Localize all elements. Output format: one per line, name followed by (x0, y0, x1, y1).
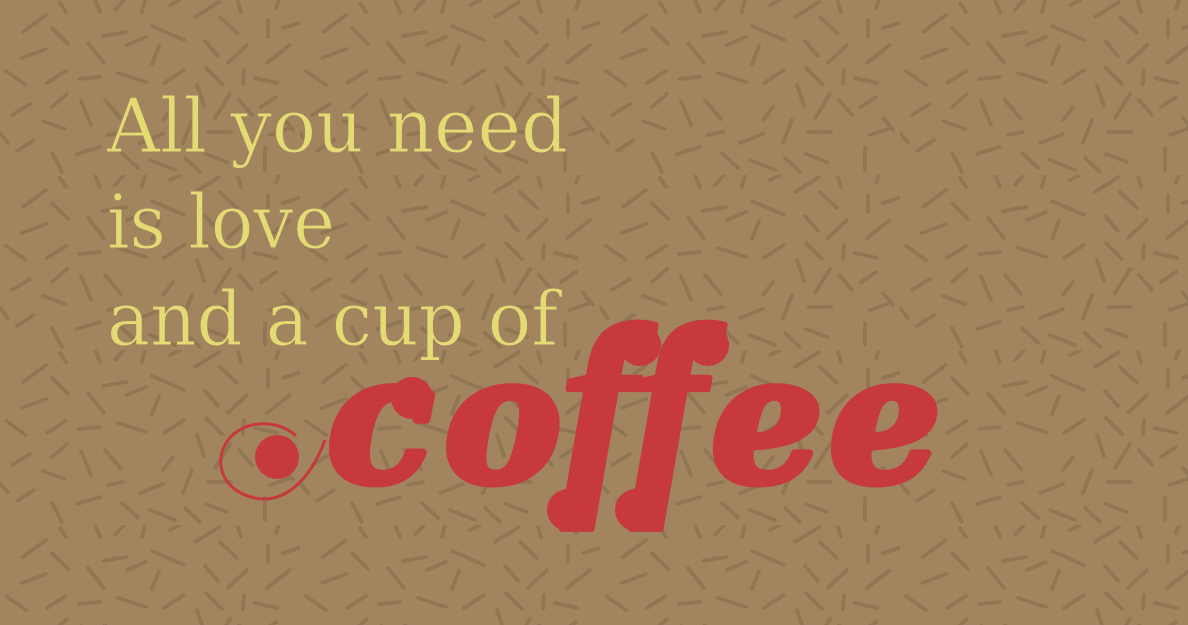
word: coffee: ee (711, 316, 941, 523)
headline (106, 82, 568, 363)
line 1: All you need (106, 82, 568, 170)
line 3: and a cup of (107, 275, 563, 363)
swash on the c (221, 424, 325, 499)
line 2: is love (107, 178, 335, 266)
crossbars on the f letters (580, 376, 710, 378)
coffee wordmark (221, 280, 941, 531)
f terminals (547, 324, 729, 531)
word: coffee: ff (562, 280, 725, 530)
ball terminal on the c (391, 377, 433, 419)
word: coffee: co (327, 316, 561, 523)
